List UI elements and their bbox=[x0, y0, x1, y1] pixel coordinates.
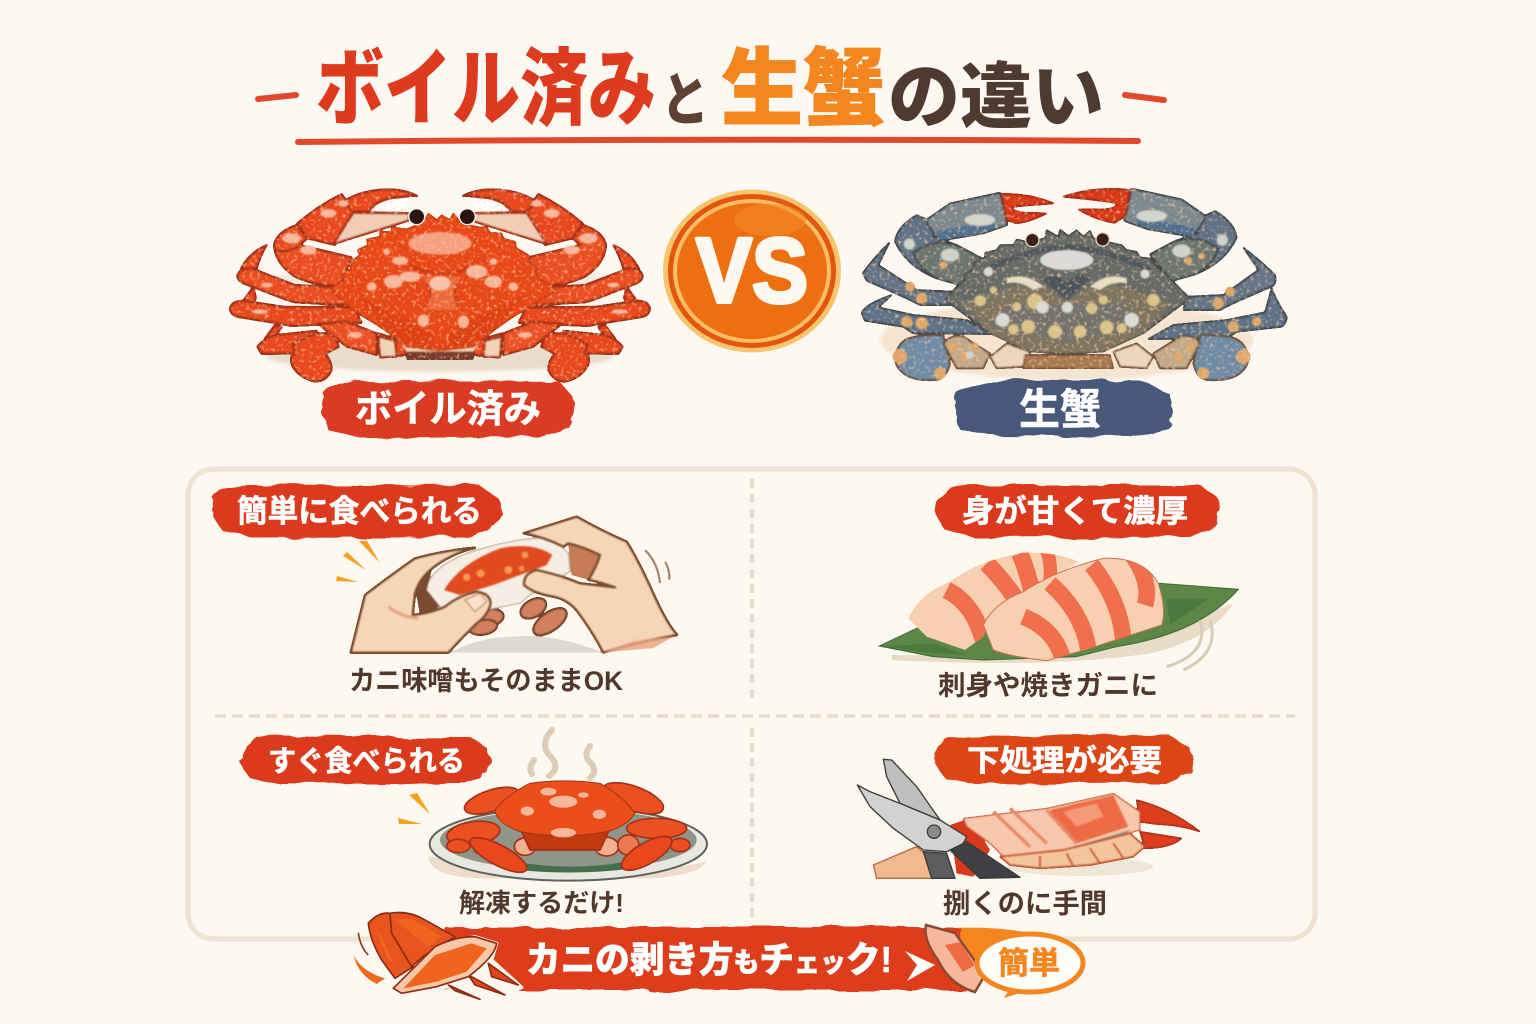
title: と bbox=[661, 68, 709, 133]
icon: sparks bbox=[336, 541, 380, 582]
raw crab illustration bbox=[862, 189, 1287, 380]
crab meat bbox=[425, 538, 570, 612]
caption: カニ味噌もそのままOK bbox=[349, 666, 623, 696]
eyes bbox=[1026, 233, 1109, 247]
title: ボイル済み bbox=[316, 42, 656, 136]
crab body bbox=[230, 189, 650, 382]
label: boiled bbox=[322, 380, 575, 438]
title: の違い bbox=[888, 58, 1104, 138]
VS badge: VS bbox=[696, 220, 808, 322]
caption: 刺身や焼きガニに bbox=[938, 671, 1158, 701]
icon: arrow bbox=[905, 951, 935, 981]
icon: shell piece bbox=[926, 925, 985, 992]
caption: 捌くのに手間 bbox=[943, 889, 1107, 919]
tag: sweet and rich bbox=[935, 485, 1220, 538]
tag: easy to eat bbox=[211, 485, 501, 538]
left claw and legs bbox=[230, 189, 417, 382]
crab leg meat bbox=[950, 793, 1200, 877]
caption: 解凍するだけ! bbox=[459, 888, 624, 918]
VS badge bbox=[663, 190, 841, 352]
tag: sweet and rich: 身が甘くて濃厚 bbox=[962, 494, 1188, 529]
tag: easy to eat: 簡単に食べられる bbox=[237, 494, 482, 529]
icon: crab legs bbox=[353, 912, 522, 1002]
bottom call-to-action banner: カニの剥き方もチェック! bbox=[526, 939, 892, 980]
illustration: hands breaking crab bbox=[351, 517, 677, 653]
left claw and legs bbox=[862, 193, 1053, 380]
scissors bbox=[857, 759, 1020, 878]
tag: ready to eat: すぐ食べられる bbox=[268, 745, 465, 778]
title bbox=[316, 42, 1104, 138]
label: raw bbox=[955, 380, 1173, 437]
illustration: scissors cutting crab leg bbox=[857, 759, 1200, 878]
title: 生蟹 bbox=[721, 42, 885, 136]
right claw bbox=[1063, 189, 1237, 281]
plated crab with legs bbox=[445, 776, 690, 879]
icon: sparks bbox=[398, 793, 430, 824]
back sashimi piece bbox=[908, 552, 1078, 650]
bottom call-to-action banner bbox=[353, 912, 1083, 1002]
illustration: crab on plate bbox=[428, 776, 707, 881]
right legs bbox=[1148, 248, 1287, 339]
right paddle bbox=[1113, 335, 1251, 380]
comparison panel bbox=[188, 469, 1315, 939]
boiled crab illustration bbox=[230, 189, 650, 382]
front sashimi piece bbox=[984, 558, 1164, 660]
title underline and side dashes bbox=[258, 95, 1164, 142]
eyes bbox=[409, 209, 475, 225]
label: boiled: ボイル済み bbox=[355, 389, 541, 431]
speech bubble bbox=[977, 934, 1083, 998]
illustration: sashimi on leaf bbox=[879, 547, 1238, 670]
tag: needs prep bbox=[934, 735, 1194, 784]
crab body bbox=[862, 189, 1287, 380]
label: raw: 生蟹 bbox=[1019, 386, 1101, 433]
speech bubble: 簡単 bbox=[998, 946, 1060, 981]
icon: steam bbox=[530, 730, 594, 778]
tag: ready to eat bbox=[240, 736, 490, 784]
tag: needs prep: 下処理が必要 bbox=[967, 744, 1162, 778]
